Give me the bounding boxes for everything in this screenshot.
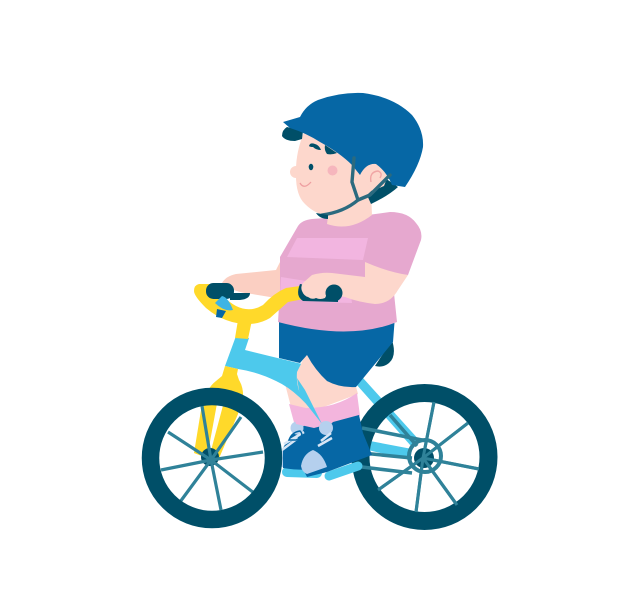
right grip bar (298, 284, 338, 302)
neck and head (290, 130, 388, 227)
ear over helmet edge (362, 165, 387, 191)
back arm (222, 260, 282, 299)
front hub (201, 448, 219, 466)
left grip (206, 283, 234, 299)
nose (290, 166, 302, 178)
chin strap shadow (316, 213, 328, 219)
inner ear (371, 171, 381, 182)
helmet (283, 93, 423, 187)
smile (300, 182, 311, 186)
front wheel (150, 396, 274, 520)
handlebar (194, 284, 308, 339)
bicycle frame (225, 336, 420, 460)
hair: fringe (282, 127, 303, 141)
back grip (230, 293, 250, 300)
front leg sock (291, 393, 360, 428)
rear wheel (360, 393, 488, 521)
helmet strap (322, 158, 390, 215)
back boot (265, 422, 326, 473)
back leg (284, 380, 320, 426)
hair: side (325, 145, 337, 154)
bicycle fork (194, 366, 243, 463)
front boot (301, 415, 372, 477)
right grip end (326, 284, 342, 302)
frame tip over leg (297, 378, 322, 424)
shirt (278, 212, 421, 332)
eye (309, 164, 313, 170)
seat (375, 340, 394, 367)
bell (215, 296, 233, 318)
hair: back (367, 178, 398, 204)
front leg (297, 352, 358, 411)
front arm and hand (301, 262, 408, 304)
shorts (279, 316, 395, 387)
ear detail (371, 171, 381, 182)
ear (362, 165, 388, 191)
cheek (328, 166, 338, 176)
chain and rear gear (362, 402, 479, 512)
eyebrow (309, 143, 321, 150)
